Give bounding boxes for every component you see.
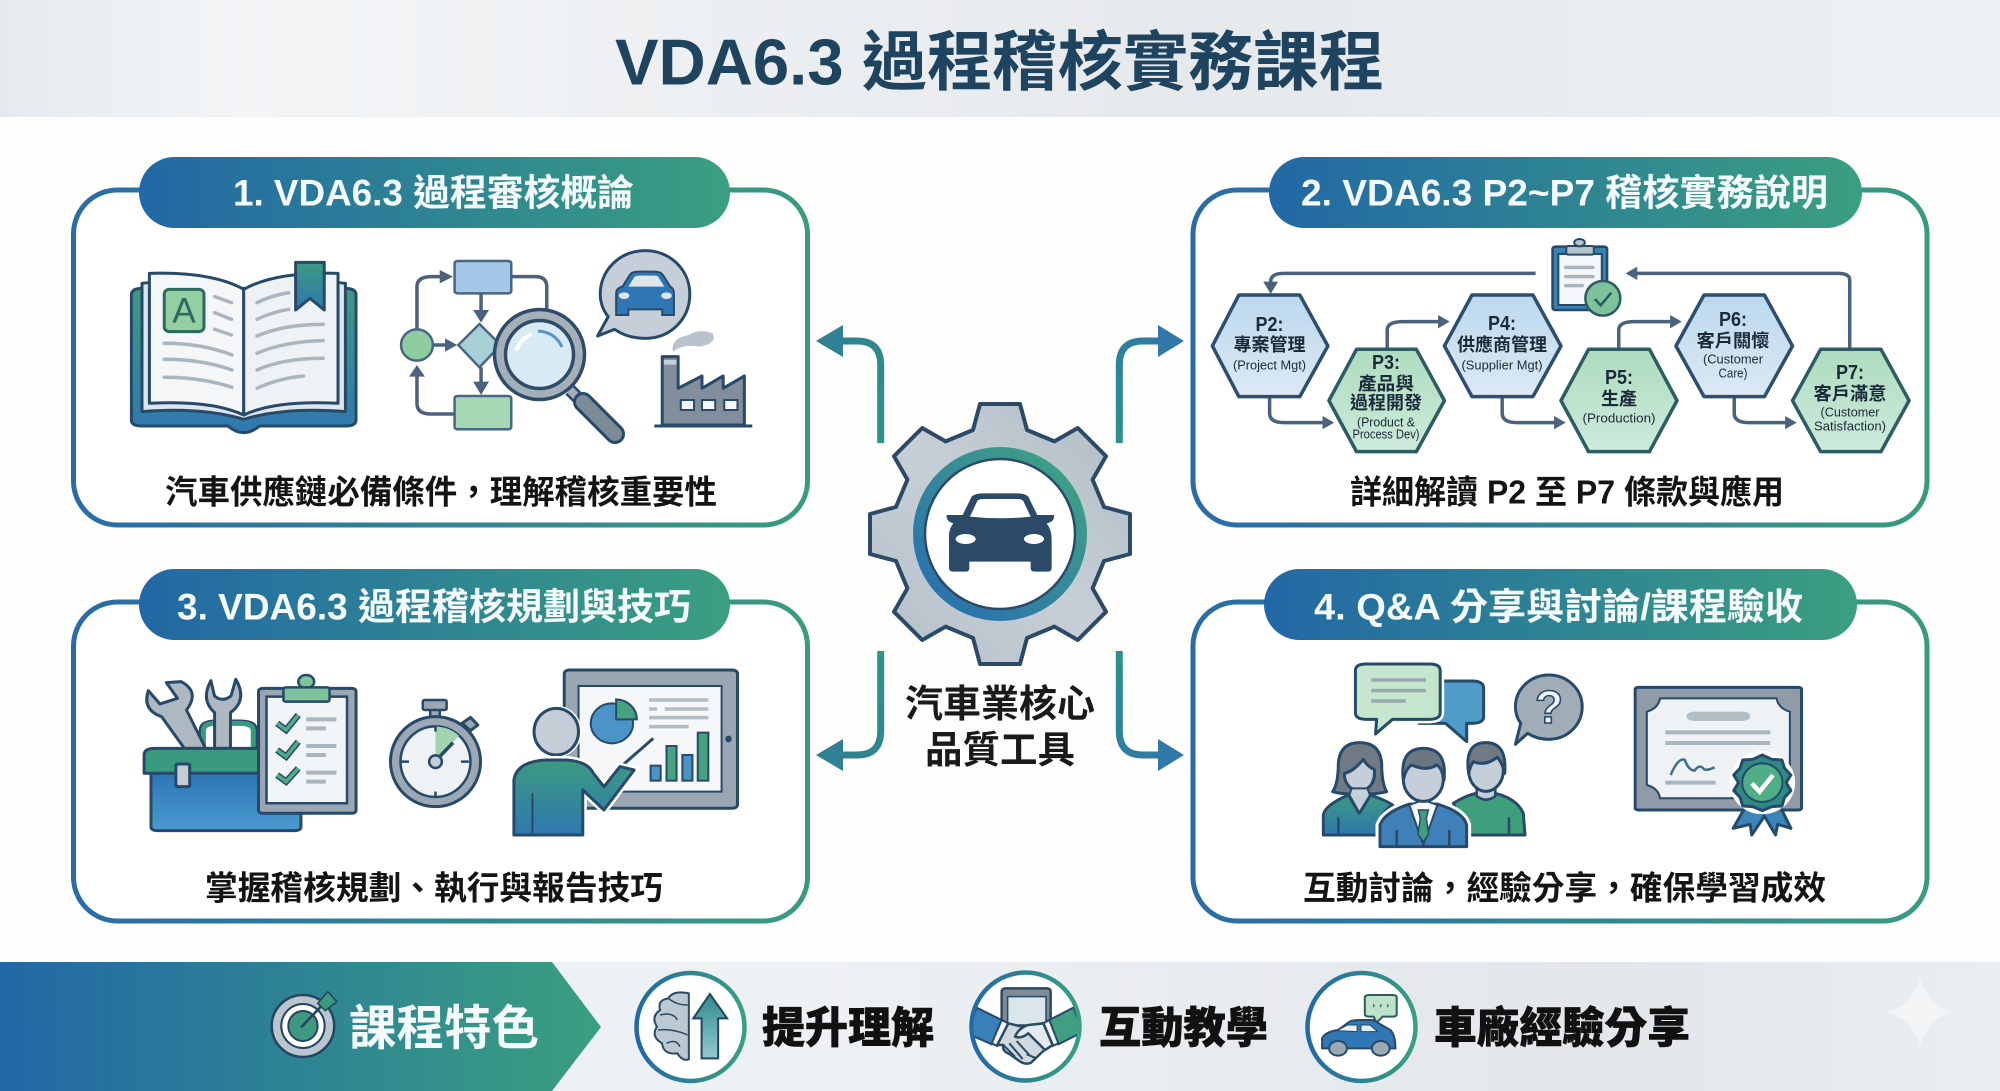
gear body — [870, 404, 1130, 664]
text: 提升理解 — [762, 1005, 934, 1053]
panel heading: 1. VDA6.3 過程審核概論 — [233, 172, 634, 214]
hexagon P6 customer care: Care) — [1718, 366, 1748, 380]
hexagon P3 product and process development: Process Dev) — [1352, 426, 1420, 442]
panel frame — [74, 190, 808, 525]
panel heading — [139, 569, 730, 640]
hexagon P5 production — [1561, 349, 1677, 452]
hexagon P3 product and process development: 過程開發 — [1350, 392, 1422, 413]
icon: stopwatch — [390, 700, 481, 807]
panel: 4 Q&A and acceptance — [1193, 569, 1927, 921]
panel frame — [1193, 602, 1927, 921]
panel frame — [1193, 190, 1927, 525]
icon: certificate with seal — [1635, 687, 1802, 835]
caption: 互動討論，經驗分享，確保學習成效 — [1303, 870, 1826, 906]
caption: 詳細解讀 P2 至 P7 條款與應用 — [1350, 474, 1784, 510]
text: 車廠經驗分享 — [1434, 1004, 1690, 1053]
icon: car with chat bubble — [1322, 995, 1397, 1056]
icon: brain and up arrow — [654, 992, 727, 1060]
hexagon P2 project management — [1212, 295, 1328, 397]
panel heading — [1264, 569, 1857, 640]
icon: tablet and handshake — [967, 988, 1083, 1064]
gradient ring — [919, 453, 1081, 615]
center label: 品質工具 — [925, 730, 1075, 772]
hexagon P2 project management: P2: — [1256, 314, 1284, 336]
center label — [905, 684, 1095, 772]
footer arrow banner — [0, 962, 601, 1091]
icon: question bubble: ? — [1535, 681, 1563, 733]
hexagon P7 customer satisfaction: Satisfaction) — [1814, 418, 1886, 434]
feature: improve understanding — [636, 973, 934, 1081]
central gear with car — [870, 404, 1130, 664]
footer band — [0, 962, 2000, 1091]
flow connectors — [1263, 267, 1850, 429]
hexagon P7 customer satisfaction — [1793, 349, 1909, 452]
hexagon P6 customer care — [1676, 295, 1793, 397]
arrow: center to panel 1 — [816, 325, 881, 443]
hexagon P3 product and process development: P3: — [1372, 352, 1400, 374]
panel: 1 VDA6.3 process audit overview — [74, 157, 808, 525]
header band — [0, 0, 2000, 117]
panel heading: 4. Q&A 分享與討論/課程驗收 — [1314, 586, 1803, 628]
hexagon P4 supplier management: P4: — [1488, 313, 1516, 335]
hexagon P7 customer satisfaction: (Customer — [1820, 404, 1880, 420]
hexagon P2 project management: (Project Mgt) — [1233, 358, 1306, 372]
icon: car speech bubble — [598, 251, 690, 338]
feature: car maker experience sharing — [1308, 973, 1690, 1081]
icon: question bubble — [1515, 675, 1582, 744]
hexagon P2 project management: 專案管理 — [1234, 334, 1306, 355]
hexagon P6 customer care: (Customer — [1703, 352, 1764, 366]
caption: 掌握稽核規劃、執行與報告技巧 — [205, 870, 663, 906]
center label: 汽車業核心 — [905, 684, 1095, 726]
panel heading — [1269, 157, 1862, 228]
arrow: center to panel 3 — [816, 651, 881, 771]
arrow: center to panel 2 — [1119, 325, 1184, 443]
icon: process flow with magnifier — [401, 261, 615, 434]
arrow: center to panel 4 — [1119, 651, 1184, 771]
icon: clipboard with check — [1553, 239, 1620, 316]
hexagon P3 product and process development: (Product & — [1357, 414, 1415, 430]
hexagon P6 customer care: P6: — [1719, 309, 1747, 331]
hexagon P5 production: 生產 — [1601, 388, 1637, 409]
icon: toolbox with wrenches — [144, 679, 301, 831]
panel: 2 P2-P7 audit practice — [1193, 157, 1927, 525]
icon: presenter at tablet — [514, 670, 737, 835]
icon: open book — [131, 262, 356, 433]
panel: 3 audit planning and skills — [74, 569, 808, 921]
title: VDA6.3 過程稽核實務課程 — [615, 26, 1384, 98]
icon: car front — [947, 493, 1054, 572]
panel heading: 2. VDA6.3 P2~P7 稽核實務說明 — [1301, 172, 1828, 214]
hexagon P5 production: (Production) — [1582, 410, 1656, 426]
icon: open book: A — [172, 292, 196, 330]
hexagon P4 supplier management: (Supplier Mgt) — [1462, 358, 1542, 372]
hexagon P4 supplier management — [1444, 295, 1561, 397]
panel heading: 3. VDA6.3 過程稽核規劃與技巧 — [177, 586, 691, 628]
icon: factory — [654, 331, 752, 426]
hexagon P3 product and process development — [1329, 349, 1444, 452]
feature: interactive teaching — [967, 972, 1268, 1080]
icon: group of people — [1323, 743, 1525, 847]
footer background — [0, 962, 2000, 1091]
hexagon P7 customer satisfaction: P7: — [1836, 362, 1864, 384]
hexagon P7 customer satisfaction: 客戶滿意 — [1814, 383, 1886, 404]
hexagon P5 production: P5: — [1605, 367, 1633, 389]
icon: discussion bubbles — [1355, 664, 1484, 742]
label: course features: 課程特色 — [349, 1002, 539, 1056]
panel frame — [74, 602, 808, 921]
panel heading — [139, 157, 730, 228]
caption: 汽車供應鏈必備條件，理解稽核重要性 — [165, 474, 717, 510]
hexagon P3 product and process development: 產品與 — [1358, 373, 1414, 394]
icon: sparkle watermark — [1886, 977, 1954, 1047]
hexagon P4 supplier management: 供應商管理 — [1457, 334, 1547, 355]
text: 互動教學 — [1099, 1005, 1268, 1053]
hexagon P6 customer care: 客戶關懷 — [1696, 330, 1770, 351]
icon: target with arrow — [272, 992, 337, 1057]
icon: checklist clipboard — [259, 675, 356, 813]
